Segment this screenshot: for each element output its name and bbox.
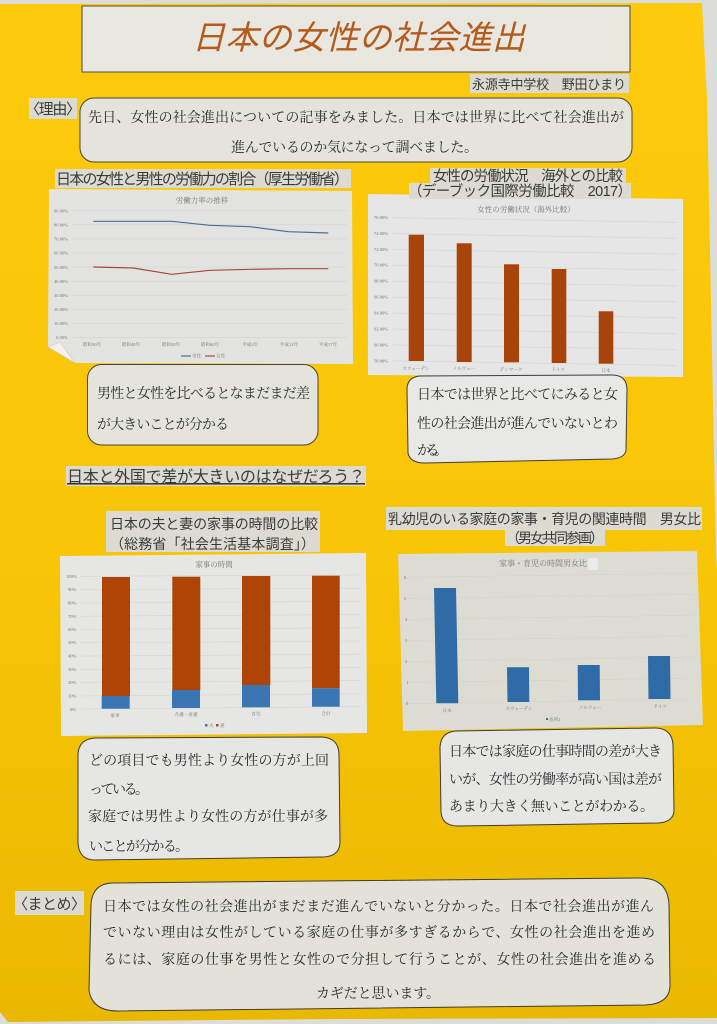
heading: labour force ratio: 日本の女性と男性の労働力の割合（厚生労働省） <box>56 171 349 188</box>
question heading: 日本と外国で差が大きいのはなぜだろう？ <box>67 468 365 486</box>
chart: childcare ratio bars: 家事・育児の時間男女比 <box>499 558 587 568</box>
chart: childcare ratio bars: 3 <box>405 638 408 643</box>
heading: childcare time ratio <box>386 507 702 546</box>
title <box>82 6 630 72</box>
panel: reason: 進んでいるのか気になって調べました。 <box>231 140 478 156</box>
chart: housework stacked bars: 育児 <box>251 710 261 718</box>
heading: housework time: 日本の夫と妻の家事の時間の比較 <box>110 516 318 532</box>
callout: Japan vs world: 性の社会進出が進んでいないとわ <box>417 415 618 432</box>
chart: labour force line chart: 0.00% <box>56 335 68 340</box>
chart: childcare ratio bars: 1 <box>406 680 409 685</box>
chart: housework stacked bars: 介護・看護 <box>175 711 198 718</box>
chart: women's labour bars: スウェーデン <box>402 365 430 372</box>
chart: housework stacked bars: 70% <box>68 614 77 619</box>
chart: childcare ratio bars: 2 <box>405 659 408 664</box>
chart: women's labour bars: 58.00% <box>374 358 388 364</box>
chart: housework stacked bars: 60% <box>68 627 77 632</box>
callout: Japan vs world <box>407 375 627 463</box>
title: 日本の女性の社会進出 <box>192 19 527 56</box>
callout: time gap <box>440 728 674 826</box>
chart: labour force line chart: 80.00% <box>54 222 68 228</box>
callout: housework difference: っている。 <box>89 783 149 798</box>
heading: overseas comparison <box>408 168 632 200</box>
panel: summary: でいない理由は女性がしている家庭の仕事が多すぎるからで、女性の社会進出を進め <box>103 924 655 941</box>
chart: housework stacked bars: 夫 <box>209 722 214 729</box>
chart: labour force line chart: 労働力率の推移 <box>176 195 229 205</box>
chart: childcare ratio bars: 4 <box>405 617 408 622</box>
callout: time gap: あまり大きく無いことがわかる。 <box>449 798 654 815</box>
chart: women's labour bars: 60.00% <box>374 342 388 348</box>
summary label: 〈まとめ〉 <box>13 896 86 913</box>
chart: women's labour bars: 68.00% <box>374 278 388 284</box>
chart: women's labour bars: 76.00% <box>374 215 388 220</box>
chart: labour force line chart: 昭和60年 <box>201 341 220 348</box>
heading: childcare time ratio: （男女共同参画） <box>506 530 604 546</box>
chart: housework stacked bars: 家事の時間 <box>195 559 233 569</box>
chart: labour force line chart: 20.00% <box>54 307 68 312</box>
chart: housework stacked bars: 妻 <box>220 722 225 729</box>
chart: women's labour bars: 70.00% <box>374 262 388 268</box>
chart: women's labour bars: デンマーク <box>500 366 522 373</box>
chart: labour force line chart: 昭和50年 <box>162 341 181 348</box>
panel: summary: カギだと思います。 <box>316 986 440 1002</box>
chart: labour force line chart: 90.00% <box>54 208 68 214</box>
chart: housework stacked bars: 10% <box>68 694 77 698</box>
chart: childcare ratio bars: 0 <box>406 701 409 706</box>
callout: Japan vs world: 日本では世界と比べてにみると女 <box>417 386 618 403</box>
callout: men vs women: 男性と女性を比べるとなまだまだ差 <box>97 385 310 402</box>
chart: childcare ratio bars: 6 <box>404 575 407 580</box>
chart: childcare ratio bars: 5 <box>404 596 407 601</box>
chart: housework stacked bars: 30% <box>68 667 77 672</box>
chart: women's labour bars: ノルウェー <box>453 366 476 372</box>
chart: women's labour bars: 日本 <box>601 367 611 374</box>
panel: summary <box>89 878 670 1011</box>
author: 永源寺中学校 野田ひまり <box>472 77 626 92</box>
chart: childcare ratio bars <box>398 551 703 731</box>
chart: housework stacked bars: 80% <box>68 600 77 606</box>
chart: labour force line chart: 40.00% <box>54 279 68 284</box>
chart: labour force line chart: 60.00% <box>54 250 68 256</box>
chart: housework stacked bars: 100% <box>66 574 77 579</box>
chart: women's labour bars: 66.00% <box>374 294 388 300</box>
chart: women's labour bars: 64.00% <box>374 310 388 316</box>
callout: housework difference <box>78 737 340 860</box>
panel: summary: るには、家庭の仕事を男性と女性ので分担して行うことが、女性の社会進出を進める <box>103 951 656 968</box>
chart: women's labour bars <box>368 194 683 377</box>
panel: reason <box>80 98 632 162</box>
chart: childcare ratio bars: 系列1 <box>549 716 561 723</box>
heading: childcare time ratio: 乳幼児のいる家庭の家事・育児の関連時間 男女比 <box>388 511 701 527</box>
reason label: 〈理由〉 <box>25 101 81 118</box>
heading: overseas comparison: 女性の労働状況 海外との比較 <box>433 168 624 185</box>
chart: childcare ratio bars: ドイツ <box>653 704 667 710</box>
chart: women's labour bars: 72.00% <box>374 247 388 252</box>
chart: housework stacked bars: 0% <box>70 707 76 712</box>
callout: housework difference: どの項目でも男性より女性の方が上回 <box>89 752 329 769</box>
chart: housework stacked bars: 家事 <box>110 712 120 719</box>
chart: labour force line chart: 昭和50年 <box>83 341 102 348</box>
heading: housework time: （総務省「社会生活基本調査」） <box>110 536 315 552</box>
chart: labour force line chart: 昭和40年 <box>122 341 141 348</box>
chart: housework stacked bars: 合計 <box>321 710 331 717</box>
chart: women's labour bars: ドイツ <box>551 367 565 373</box>
chart: housework stacked bars <box>60 553 367 736</box>
chart: labour force line chart: 女性 <box>216 352 226 360</box>
chart: women's labour bars: 74.00% <box>374 231 388 236</box>
chart: childcare ratio bars: 日本 <box>442 707 452 714</box>
callout: men vs women <box>88 364 318 445</box>
chart: housework stacked bars: 40% <box>68 654 77 658</box>
callout: time gap: いが、女性の労働率が高い国は差が <box>449 771 662 788</box>
chart: labour force line chart: 10.00% <box>54 321 68 326</box>
chart: labour force line chart <box>48 189 353 364</box>
callout: Japan vs world: かる。 <box>417 444 448 459</box>
callout: housework difference: 家庭では男性より女性の方が仕事が多 <box>88 808 328 825</box>
chart: labour force line chart: 平成17年 <box>319 341 338 348</box>
heading: housework time <box>106 511 320 552</box>
chart: labour force line chart: 男性 <box>192 352 202 360</box>
callout: housework difference: いことが分かる。 <box>89 839 189 855</box>
panel: summary: 日本では女性の社会進出がまだまだ進んでいないと分かった。日本で社会進出が進ん <box>103 898 654 915</box>
callout: men vs women: が大きいことが分かる <box>97 416 229 433</box>
chart: women's labour bars: 62.00% <box>374 326 388 332</box>
callout: time gap: 日本では家庭の仕事時間の差が大き <box>449 743 662 760</box>
chart: women's labour bars: 女性の労働状況（海外比較） <box>477 204 575 214</box>
chart: housework stacked bars: 90% <box>68 587 77 592</box>
panel: reason: 先日、女性の社会進出についての記事をみました。日本では世界に比べて社会進出が <box>88 109 624 126</box>
heading: overseas comparison: （デーブック国際労働比較 2017） <box>408 182 632 200</box>
chart: childcare ratio bars: ノルウェー <box>579 705 602 711</box>
chart: labour force line chart: 50.00% <box>54 265 68 270</box>
chart: housework stacked bars: 20% <box>68 680 77 685</box>
chart: labour force line chart: 70.00% <box>54 236 68 242</box>
chart: labour force line chart: 平成2年 <box>242 341 258 348</box>
chart: childcare ratio bars: スウェーデン <box>505 705 533 712</box>
chart: labour force line chart: 平成12年 <box>280 341 299 348</box>
chart: housework stacked bars: 50% <box>68 640 77 645</box>
chart: labour force line chart: 30.00% <box>54 293 68 298</box>
